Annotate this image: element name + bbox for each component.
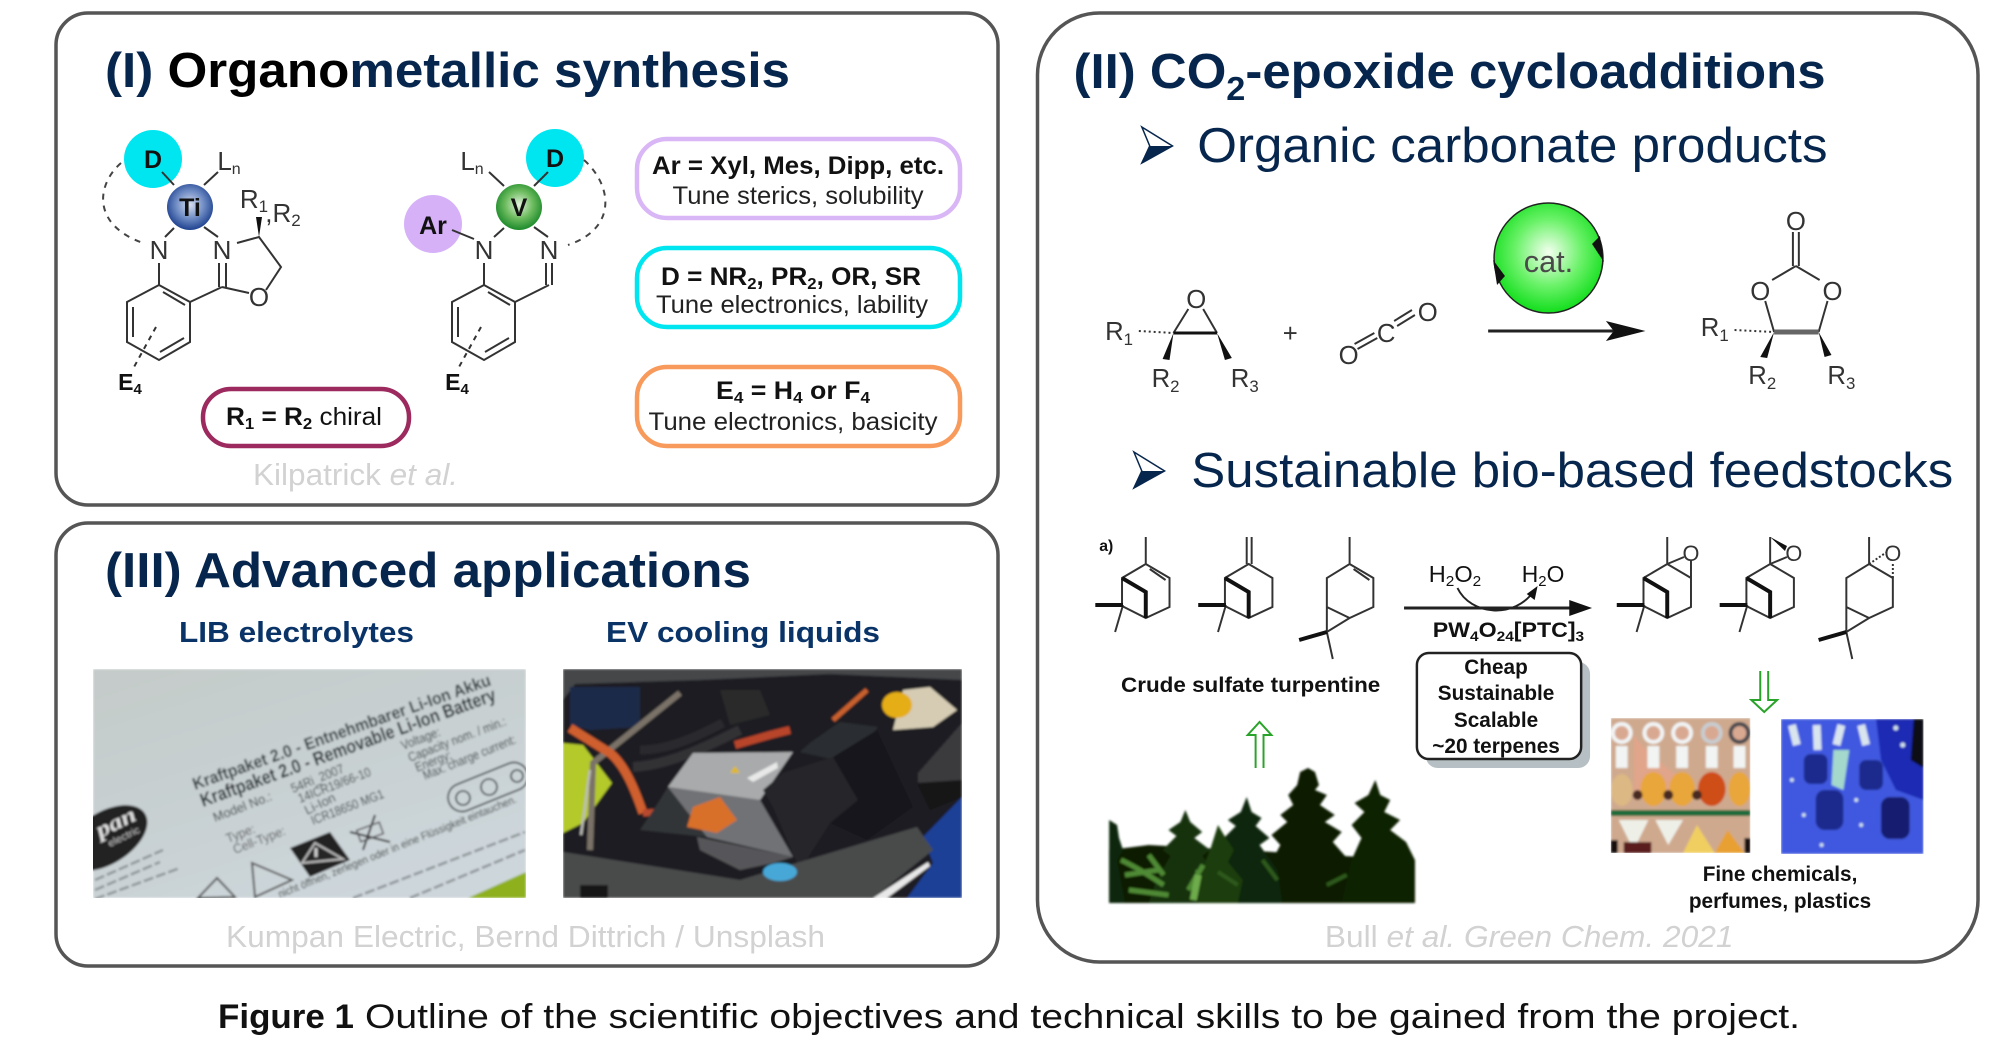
molecule: vanadium complex: Ar xyxy=(419,212,447,240)
panel: CO2-epoxide cycloadditions xyxy=(1038,13,1978,962)
reaction arrow: epoxidation: 3 xyxy=(1576,628,1584,644)
photo: battery label: 14ICR19/66-10 xyxy=(296,764,373,806)
panel: organometallic synthesis xyxy=(56,13,998,505)
photo: battery label: electric xyxy=(106,825,142,850)
molecule: titanium complex: N xyxy=(150,235,168,265)
photo: battery label: Cell-Type: xyxy=(231,823,287,857)
panel frame II xyxy=(1038,13,1978,962)
molecule: titanium complex xyxy=(103,130,301,398)
callout: donor substituent: Tune electronics, lability xyxy=(656,291,929,319)
reaction arrow: epoxidation: 2 xyxy=(1473,573,1481,590)
molecule: vanadium complex: E xyxy=(445,369,460,395)
arrow: down to products xyxy=(1751,671,1777,712)
molecule: vanadium complex: L xyxy=(460,146,475,176)
bullet: organic carbonate products: Organic carbonate products xyxy=(1197,119,1828,173)
callout: cheap, sustainable, scalable: Cheap xyxy=(1464,656,1528,679)
reaction arrow: epoxidation xyxy=(1404,561,1592,644)
molecule: cyclic carbonate: R xyxy=(1748,362,1767,390)
callout: chiral R groups: chiral xyxy=(312,403,382,431)
molecule: epoxide: 2 xyxy=(1170,377,1180,396)
molecule: vanadium complex: D xyxy=(546,145,564,173)
heading: advanced applications: (III) Advanced applications xyxy=(105,544,751,598)
icon: catalyst cycle xyxy=(1493,203,1604,313)
callout: donor substituent: 2 xyxy=(807,276,817,293)
label: fine chemicals, perfumes, plastics: Fine chemicals, xyxy=(1703,863,1857,886)
photo: battery label: 54Ri_2007 xyxy=(289,761,346,796)
molecule: carbon dioxide: O xyxy=(1339,342,1359,370)
reaction arrow: epoxidation: 24 xyxy=(1497,628,1514,644)
molecule: titanium complex: 1 xyxy=(259,197,268,216)
arrow: reaction xyxy=(1488,321,1645,341)
molecule: titanium complex: n xyxy=(232,161,241,178)
molecule: cyclic carbonate: R xyxy=(1827,362,1846,390)
callout: cheap, sustainable, scalable: Scalable xyxy=(1454,709,1538,732)
molecule: cyclic carbonate: O xyxy=(1822,278,1842,306)
photo: battery label xyxy=(93,669,526,898)
molecule: epoxide: R xyxy=(1231,365,1249,393)
callout: donor substituent: D = NR xyxy=(661,263,744,291)
molecule: titanium complex: ,R xyxy=(265,198,291,228)
reaction arrow: epoxidation: PW xyxy=(1433,619,1466,642)
heading: CO2-epoxide cycloadditions: (II) CO xyxy=(1074,45,1219,99)
callout: E4 substituent: = H xyxy=(743,377,793,405)
molecule: vanadium complex: 4 xyxy=(460,381,470,398)
molecule: vanadium complex: n xyxy=(475,161,484,178)
callout: E4 substituent: E xyxy=(716,377,733,405)
photo: battery label: pan xyxy=(89,802,140,844)
molecule: vanadium complex xyxy=(404,129,605,398)
image: perfume bottles xyxy=(1611,718,1750,853)
molecule: epoxide xyxy=(1105,286,1259,396)
molecule: carbon dioxide: C xyxy=(1377,320,1396,348)
molecule: titanium complex: 2 xyxy=(291,211,301,230)
molecule: epoxide: O xyxy=(1186,286,1206,314)
panel: advanced applications xyxy=(53,523,998,966)
callout: E4 substituent: 4 xyxy=(793,390,803,407)
molecule: carbon dioxide: O xyxy=(1418,299,1438,327)
molecules: terpene feedstocks xyxy=(1095,537,1373,659)
photo: battery label: nicht öffnen, zerlegen oder in eine Flüssigkeit eintauchen. xyxy=(277,794,518,901)
reaction arrow: epoxidation: O xyxy=(1454,561,1473,587)
callout: E4 substituent: or F xyxy=(803,377,860,405)
scheme label a: a) xyxy=(1099,538,1113,555)
image: conifer forest xyxy=(1109,768,1415,903)
molecule: titanium complex: L xyxy=(217,146,232,176)
molecule: epoxide: 1 xyxy=(1124,330,1133,349)
label: crude sulfate turpentine: Crude sulfate turpentine xyxy=(1121,674,1380,697)
callout: chiral R groups: 1 xyxy=(245,416,254,433)
reaction arrow: epoxidation: 4 xyxy=(1470,628,1479,644)
callout: chiral R groups: 2 xyxy=(303,416,312,433)
callout: E4 substituent: Tune electronics, basicity xyxy=(648,408,938,436)
image: blue plastic bottles xyxy=(1781,719,1924,854)
reaction arrow: epoxidation: 2 xyxy=(1538,573,1547,590)
molecule: vanadium complex: N xyxy=(475,235,493,265)
photo: battery label: Max. charge current: xyxy=(421,732,518,783)
molecule: titanium complex: Ti xyxy=(179,194,201,222)
callout: donor substituent: , PR xyxy=(757,263,807,291)
molecule: epoxide: R xyxy=(1152,365,1170,393)
molecule: cyclic carbonate: 3 xyxy=(1846,374,1855,393)
heading: organometallic synthesis: (I) Organometallic synthesis xyxy=(105,44,790,98)
molecule: titanium complex: E xyxy=(118,369,134,395)
reaction arrow: epoxidation: O xyxy=(1479,619,1497,642)
photo: battery label: Capacity nom. / min.: xyxy=(406,714,508,765)
bullet: sustainable feedstocks: Sustainable bio-based feedstocks xyxy=(1191,444,1953,498)
molecule: vanadium complex: N xyxy=(540,235,558,265)
reaction arrow: epoxidation: O xyxy=(1547,561,1564,587)
icon: catalyst cycle: cat. xyxy=(1524,244,1573,279)
panel frame III xyxy=(56,523,998,966)
callout: aryl substituent: Tune sterics, solubility xyxy=(672,182,924,210)
callout: E4 substituent xyxy=(637,367,960,446)
callout: E4 substituent: 4 xyxy=(860,390,870,407)
figure caption: Outline of the scientific objectives and technical skills to be gained from the project. xyxy=(365,998,1800,1036)
molecule: titanium complex: D xyxy=(144,146,162,174)
photo: battery label: Model No.: xyxy=(211,789,274,825)
arrow: up from forest xyxy=(1248,722,1271,768)
molecule: titanium complex: R xyxy=(240,184,259,214)
photo: battery label: Energy: xyxy=(413,747,454,775)
panel frame I xyxy=(56,13,998,505)
credit: Kilpatrick: Kilpatrick et al. xyxy=(253,457,458,492)
molecule: cyclic carbonate: O xyxy=(1786,208,1806,236)
molecule: titanium complex: 4 xyxy=(134,381,142,398)
molecule: carbon dioxide xyxy=(1339,299,1438,370)
callout: aryl substituent xyxy=(637,139,960,218)
callout: chiral R groups xyxy=(203,389,409,446)
callout: chiral R groups: R xyxy=(226,403,312,433)
subheading: LIB electrolytes: LIB electrolytes xyxy=(179,617,414,649)
reaction: epoxide plus CO2 to cyclic carbonate xyxy=(1105,203,1855,396)
photo: battery label: Voltage: xyxy=(399,724,442,753)
photo: battery label: Li-Ion xyxy=(302,790,338,818)
molecule: epoxide: 3 xyxy=(1249,377,1259,396)
label: fine chemicals, perfumes, plastics xyxy=(1689,863,1871,913)
molecules: terpene epoxides: O xyxy=(1683,541,1699,566)
callout: E4 substituent: 4 xyxy=(734,390,743,407)
reaction arrow: epoxidation: [PTC] xyxy=(1514,619,1576,642)
photo: battery label: ICR18650 MG1 xyxy=(309,786,386,828)
callout: cheap, sustainable, scalable xyxy=(1417,653,1590,768)
photo: EV engine bay xyxy=(563,669,962,898)
molecules: terpene epoxides: O xyxy=(1785,541,1802,566)
plus sign: + xyxy=(1283,320,1298,348)
reaction arrow: epoxidation: H xyxy=(1429,561,1445,587)
callout: donor substituent xyxy=(637,248,960,327)
molecule: epoxide: R xyxy=(1105,318,1124,346)
credit: Bull et al.: Bull et al. Green Chem. 2021 xyxy=(1325,919,1734,954)
photo: battery label: Kraftpaket 2.0 - Removable Li-Ion Battery xyxy=(198,685,499,812)
credit: photo sources: Kumpan Electric, Bernd Dittrich / Unsplash xyxy=(226,919,825,954)
heading: CO2-epoxide cycloadditions: -epoxide cycloadditions xyxy=(1245,45,1826,99)
photo: battery label: Type: xyxy=(224,821,257,846)
callout: donor substituent: 2 xyxy=(747,276,757,293)
heading: CO2-epoxide cycloadditions: 2 xyxy=(1226,70,1245,107)
molecule: titanium complex: O xyxy=(249,282,269,312)
photo: battery label: Kraftpaket 2.0 - Entnehmbarer Li-Ion Akku xyxy=(190,671,493,794)
label: fine chemicals, perfumes, plastics: perfumes, plastics xyxy=(1689,890,1871,913)
molecule: vanadium complex: V xyxy=(511,194,528,222)
molecule: cyclic carbonate: O xyxy=(1750,278,1770,306)
figure caption: Figure 1 xyxy=(218,998,354,1036)
callout: aryl substituent: Ar = Xyl, Mes, Dipp, etc. xyxy=(652,152,944,180)
molecule: cyclic carbonate xyxy=(1701,208,1855,393)
molecule: cyclic carbonate: R xyxy=(1701,314,1719,342)
molecules: terpene epoxides xyxy=(1617,537,1901,659)
molecule: titanium complex: N xyxy=(213,235,231,265)
molecule: cyclic carbonate: 2 xyxy=(1767,374,1776,393)
callout: cheap, sustainable, scalable: ~20 terpenes xyxy=(1432,735,1560,758)
subheading: EV cooling liquids: EV cooling liquids xyxy=(606,617,880,649)
molecules: terpene epoxides: O xyxy=(1884,541,1901,566)
callout: cheap, sustainable, scalable: Sustainable xyxy=(1438,682,1554,705)
reaction arrow: epoxidation: H xyxy=(1522,561,1538,587)
reaction arrow: epoxidation: 2 xyxy=(1446,573,1454,590)
callout: donor substituent: , OR, SR xyxy=(817,263,921,291)
callout: chiral R groups: = R xyxy=(254,403,303,431)
panel II contents xyxy=(1074,45,1953,954)
molecule: cyclic carbonate: 1 xyxy=(1719,326,1729,345)
